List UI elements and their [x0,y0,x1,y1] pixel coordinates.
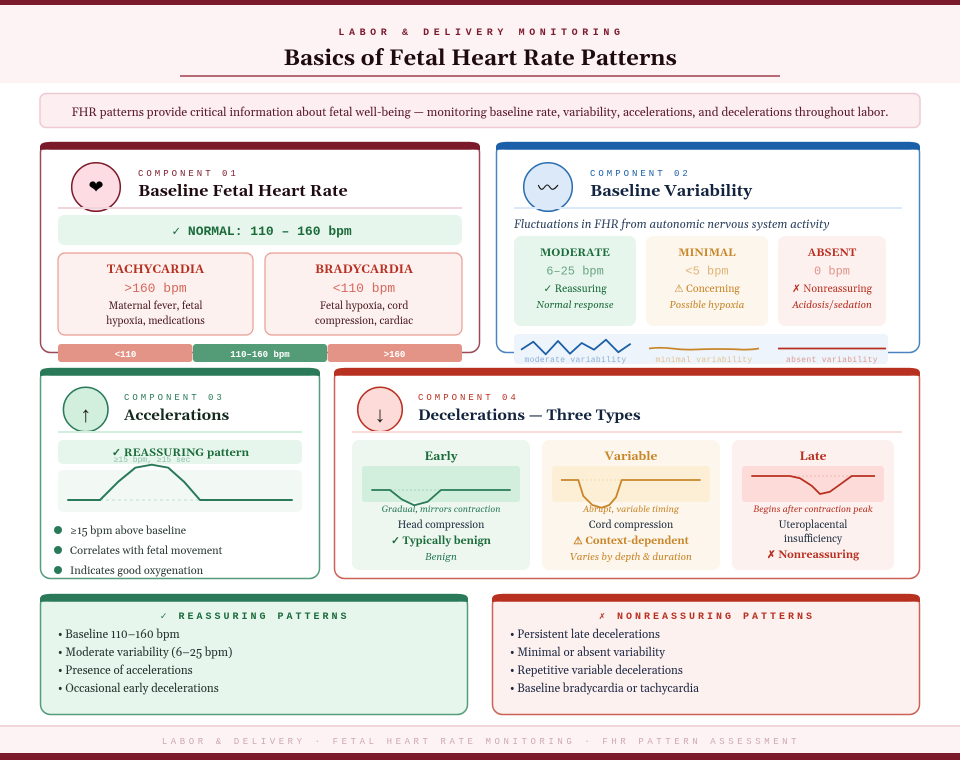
list: • Occasional early decelerations [58,681,219,696]
heading: ✓ REASSURING PATTERNS [160,612,350,623]
bullet list: ≥15 bpm above baseline [70,524,186,538]
minimal card: ⚠ Concerning [674,282,740,296]
panel: decelerations [334,368,920,578]
icon: heart: ❤ [88,177,104,198]
bullet list: Correlates with fetal movement [70,544,223,558]
absent card: Acidosis/sedation [791,300,872,312]
list: • Minimal or absent variability [510,645,665,660]
early card: Benign [425,552,457,564]
early card: Head compression [398,518,485,532]
tachycardia card [58,253,253,335]
footer [0,725,960,760]
panel heading: Decelerations — Three Types [418,407,641,426]
minimal card [646,236,768,326]
panel: baseline variability [496,142,920,365]
list: • Presence of accelerations [58,663,193,678]
variable card: Variable [604,450,657,465]
eyebrow label: LABOR & DELIVERY MONITORING [338,28,625,39]
list: • Baseline 110–160 bpm [58,627,181,642]
panel: reassuring patterns [40,594,468,714]
tachycardia card: Maternal fever, fetal [109,299,202,313]
late card: ✗ Nonreassuring [767,548,860,562]
variability traces [514,334,888,365]
variability traces: moderate variability [524,356,627,365]
moderate card: ✓ Reassuring [543,282,607,296]
late card: Uteroplacental [779,518,847,532]
tachycardia card: hypoxia, medications [106,314,205,328]
footer: LABOR & DELIVERY · FETAL HEART RATE MONITORING · FHR PATTERN ASSESSMENT [162,737,800,747]
icon: wave [524,163,572,211]
tachycardia card: TACHYCARDIA [107,263,205,278]
icon: down arrow: ↓ [374,402,386,427]
panel: baseline fetal heart rate [40,142,480,362]
intro banner [40,94,920,128]
subtitle: Fluctuations in FHR from autonomic nervous system activity [514,217,830,232]
list: • Moderate variability (6–25 bpm) [58,645,232,660]
list [510,627,699,696]
title underline [180,75,780,77]
bullet list [54,524,223,578]
icon: up arrow [63,387,108,432]
early card [352,440,530,570]
panel: accelerations [40,368,320,578]
variable trace [552,466,710,508]
list: • Persistent late decelerations [510,627,660,642]
component label: COMPONENT 04 [418,393,519,403]
bradycardia card: compression, cardiac [315,314,413,328]
heart rate range bar [58,344,462,362]
moderate card: MODERATE [540,246,610,260]
heart rate range bar: >160 [384,350,405,360]
absent card: 0 bpm [814,264,850,278]
reassuring banner: ✓ REASSURING pattern [112,446,250,460]
late card: Late [799,450,827,465]
panel heading: Baseline Variability [590,182,753,202]
reassuring banner [58,440,302,464]
early card: Gradual, mirrors contraction [381,505,501,516]
moderate card [514,236,636,326]
heart rate range bar: 110–160 bpm [230,350,290,360]
minimal card: <5 bpm [685,264,729,278]
moderate card: Normal response [535,300,614,312]
normal range banner [58,215,462,245]
early trace [362,466,520,505]
list: • Baseline bradycardia or tachycardia [510,681,699,696]
late trace [742,466,884,502]
variable card: Varies by depth & duration [570,552,692,564]
late card: insufficiency [784,532,843,546]
variable card [542,440,720,570]
acceleration trace: ≥15 bpm, ≥15 sec [114,456,191,465]
bradycardia card [265,253,462,335]
minimal card: Possible hypoxia [669,300,745,312]
variable card: Cord compression [589,518,674,532]
moderate card: 6–25 bpm [546,264,604,278]
tachycardia card: >160 bpm [124,281,187,296]
icon: up arrow: ↑ [80,402,91,427]
minimal card: MINIMAL [678,246,736,260]
absent card: ABSENT [807,246,857,260]
list: • Repetitive variable decelerations [510,663,683,678]
title: Basics of Fetal Heart Rate Patterns [283,45,677,73]
header band [0,0,960,83]
variability traces: minimal variability [656,356,752,365]
absent card [778,236,886,326]
early card: Early [425,450,458,465]
panel heading: Baseline Fetal Heart Rate [138,182,348,202]
acceleration trace [58,456,302,512]
bradycardia card: BRADYCARDIA [315,263,414,278]
intro banner: FHR patterns provide critical information about fetal well-being — monitoring baseline rate, variability, accelerations, and decelerations throughout labor. [71,106,889,121]
panel: nonreassuring patterns [492,594,920,714]
early card: ✓ Typically benign [391,534,492,548]
list [58,627,232,696]
normal range banner: ✓ NORMAL: 110 – 160 bpm [172,224,352,239]
heart rate range bar: <110 [115,350,136,360]
late card [732,440,894,570]
component label: COMPONENT 03 [124,393,225,403]
variable card: ⚠ Context-dependent [573,534,690,548]
bradycardia card: <110 bpm [333,281,395,296]
icon: down arrow [358,387,402,432]
variable card: Abrupt, variable timing [582,505,680,516]
panel heading: Accelerations [123,407,230,426]
component label: COMPONENT 01 [138,169,239,179]
heading: ✗ NONREASSURING PATTERNS [599,612,815,623]
bullet list: Indicates good oxygenation [70,564,204,578]
icon: heart [72,163,120,211]
late card: Begins after contraction peak [753,504,873,516]
variability traces: absent variability [786,356,878,365]
bradycardia card: Fetal hypoxia, cord [320,299,408,313]
absent card: ✗ Nonreassuring [792,282,873,296]
component label: COMPONENT 02 [590,169,691,179]
